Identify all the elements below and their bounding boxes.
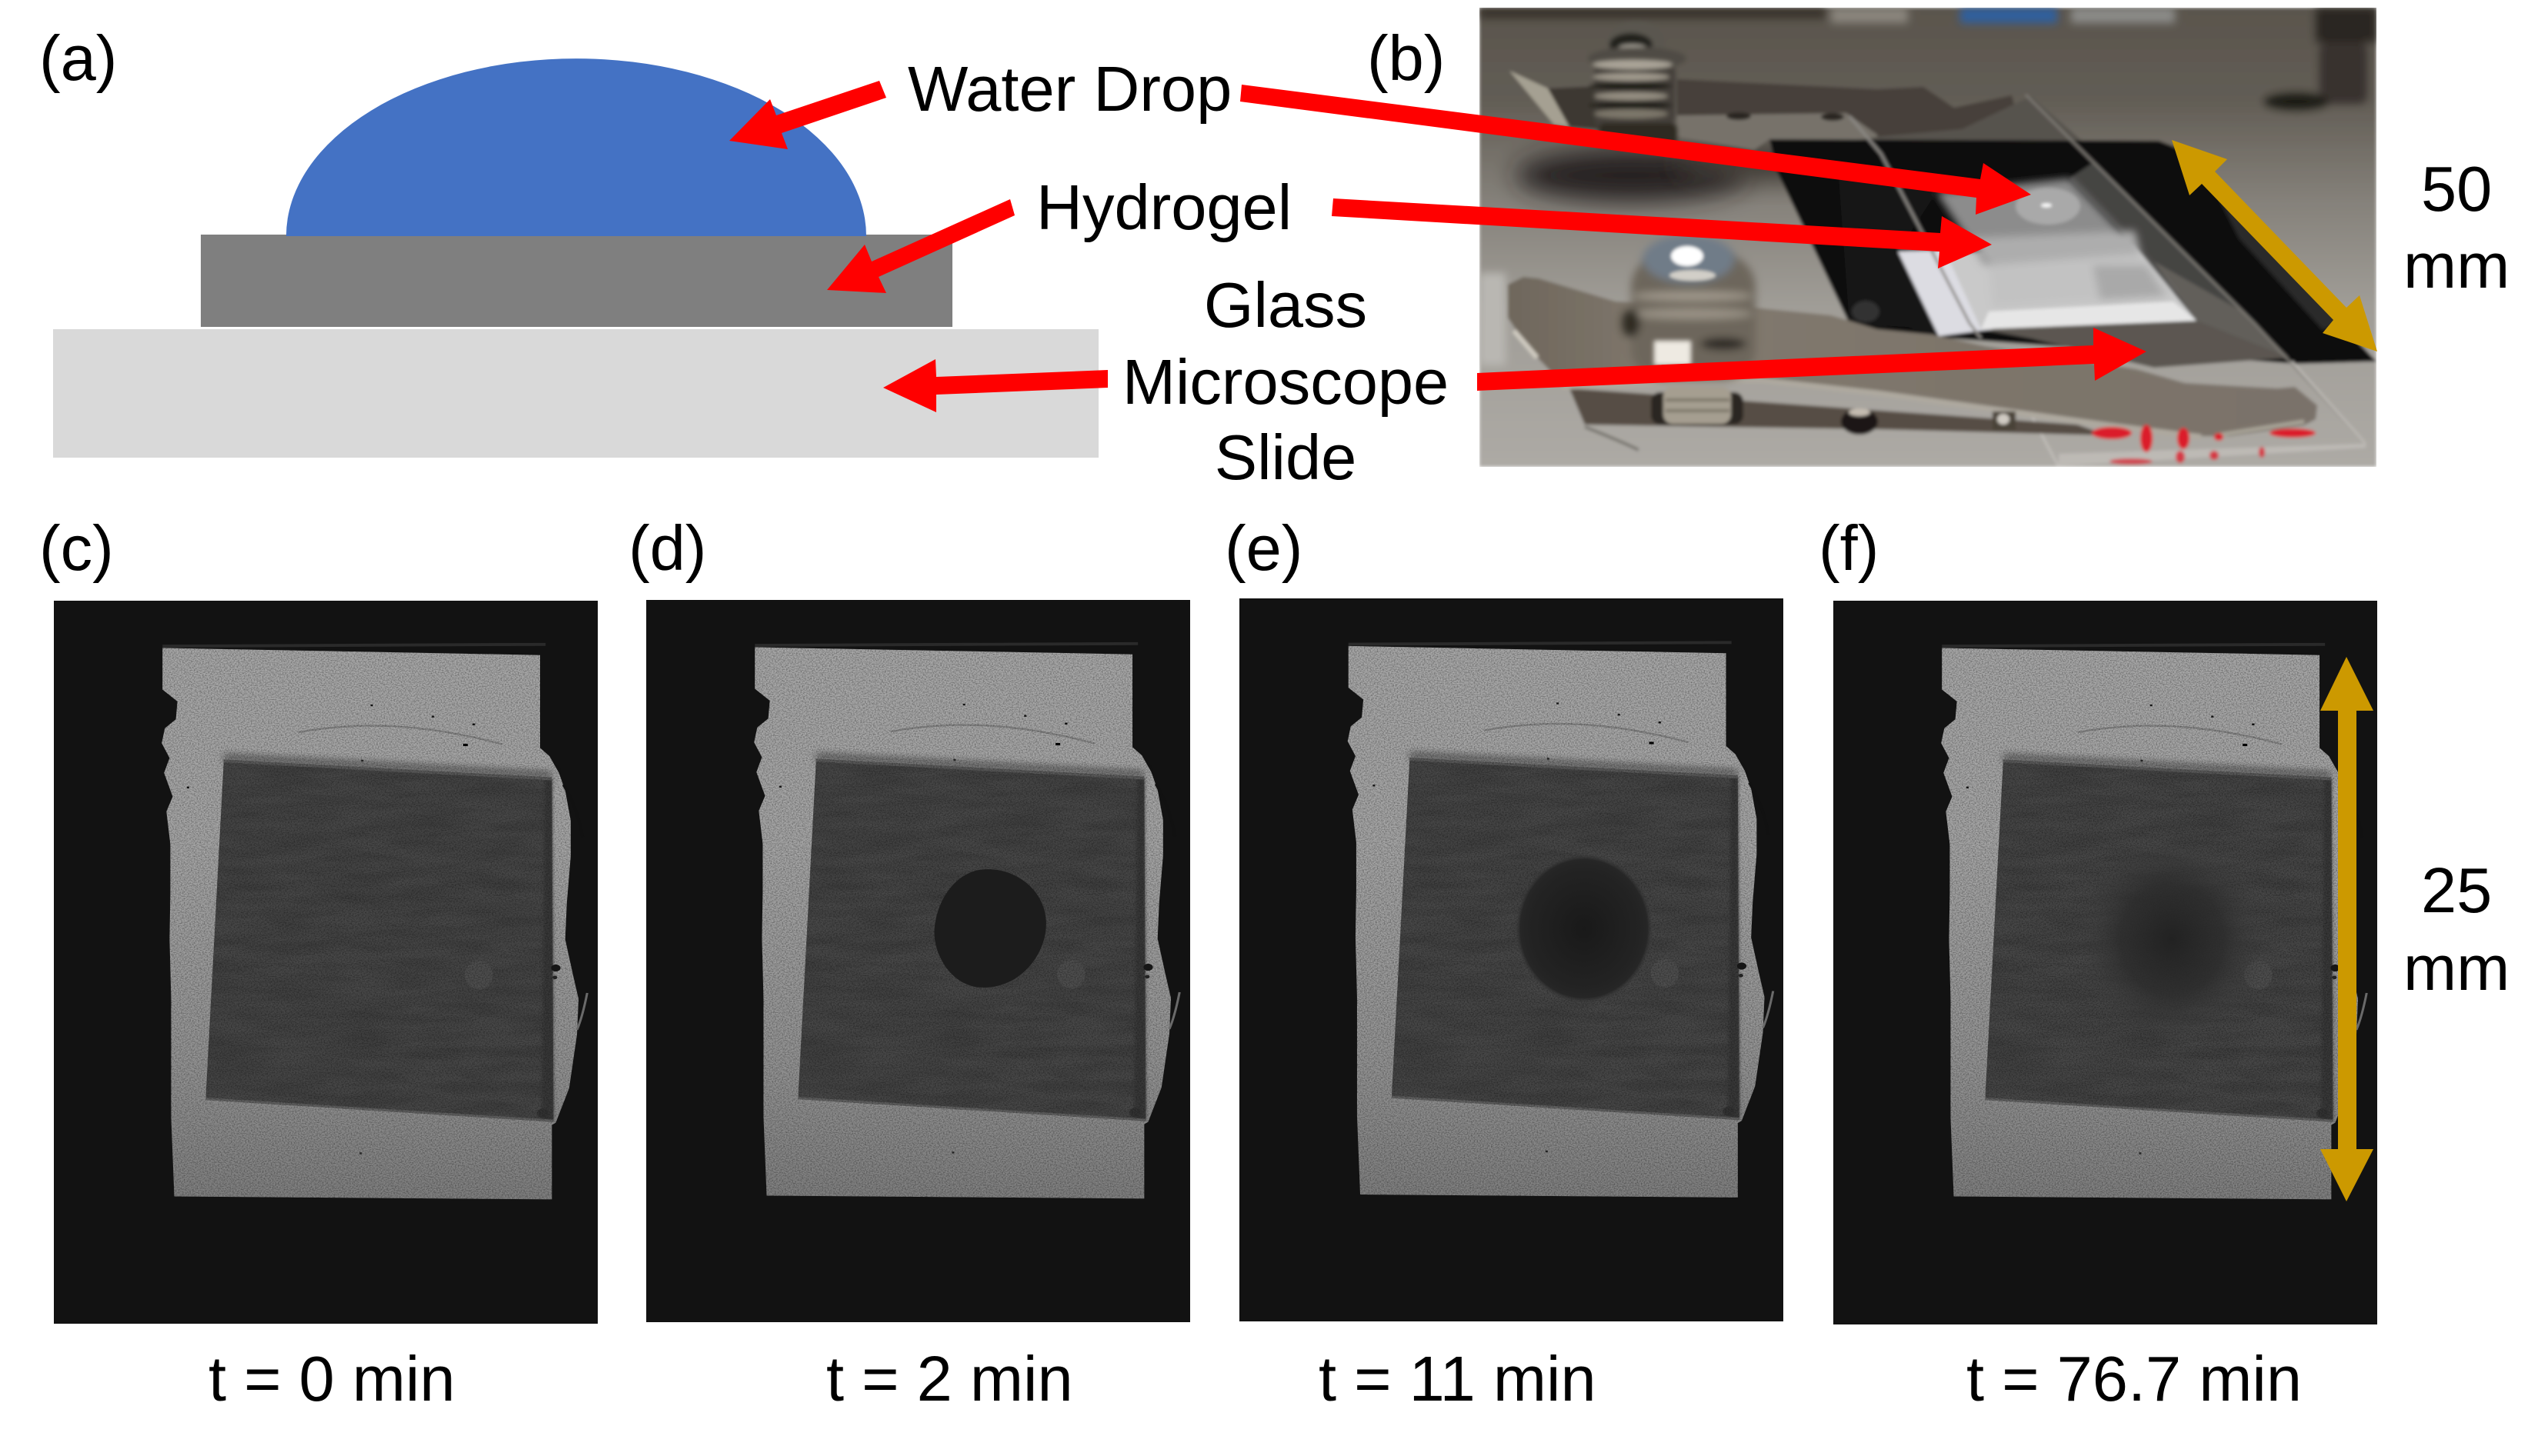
panel label (f): (f)	[1819, 512, 1879, 584]
panel a: water drop schematic	[53, 58, 1099, 458]
arrow: 50 mm dimension	[2172, 140, 2377, 352]
panel label (b): (b)	[1367, 22, 1445, 94]
spreading water spot	[1515, 854, 1653, 1004]
arrow: hydrogel label to schematic	[827, 199, 1015, 293]
bottom bolt	[1622, 254, 1756, 381]
diffused water spot	[2078, 838, 2266, 1041]
label: water drop: Water Drop	[908, 53, 1232, 125]
water drop	[286, 58, 866, 236]
label: glass microscope slide: Glass	[1204, 269, 1367, 341]
panel label (c): (c)	[39, 512, 114, 584]
label: 50 mm: 50	[2421, 153, 2492, 225]
label: 50 mm: mm	[2403, 230, 2510, 302]
hydrogel layer	[201, 235, 952, 327]
label: glass microscope slide: Microscope	[1122, 346, 1449, 418]
arrow: slide label to photo	[1477, 328, 2146, 391]
caption f: t = 76.7 min	[1966, 1343, 2302, 1414]
arrow: slide label to schematic	[883, 359, 1108, 412]
top bolt	[1589, 31, 1686, 140]
arrow: water drop label to schematic	[729, 81, 886, 149]
arrow: water drop label to photo	[1240, 85, 2031, 215]
caption c: t = 0 min	[208, 1343, 455, 1414]
panel c: t = 0 min	[54, 601, 598, 1324]
arrow: 25 mm dimension	[2320, 657, 2373, 1201]
label: glass microscope slide: Slide	[1215, 421, 1356, 493]
label: hydrogel: Hydrogel	[1036, 172, 1292, 243]
panel label (a): (a)	[39, 22, 117, 94]
arrow: hydrogel label to photo	[1332, 198, 1992, 268]
dark water spot	[934, 869, 1046, 988]
label: 25 mm: 25	[2421, 855, 2492, 926]
caption e: t = 11 min	[1319, 1343, 1596, 1414]
panel label (d): (d)	[629, 512, 706, 584]
caption d: t = 2 min	[826, 1343, 1073, 1414]
panel d: t = 2 min	[646, 600, 1190, 1322]
panel f: t = 76.7 min	[1833, 601, 2377, 1324]
glass microscope slide	[53, 329, 1099, 458]
panel label (e): (e)	[1225, 512, 1302, 584]
panel e: t = 11 min	[1239, 598, 1783, 1321]
label: 25 mm: mm	[2403, 932, 2510, 1004]
panel b: photograph of test setup	[1479, 8, 2376, 467]
